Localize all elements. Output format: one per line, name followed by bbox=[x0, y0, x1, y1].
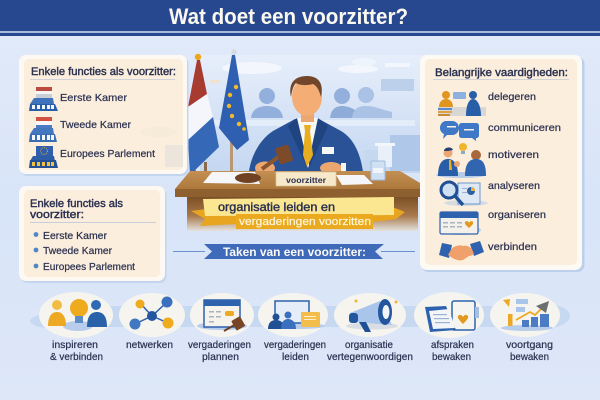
title: Wat doet een voorzitter? bbox=[169, 4, 408, 29]
label: vergaderingen bbox=[188, 339, 251, 351]
skill: motiveren: motiveren bbox=[488, 149, 539, 161]
panel: functions with icons bbox=[19, 55, 188, 176]
label bbox=[327, 339, 413, 363]
papers right bbox=[336, 175, 373, 185]
skill: verbinden: verbinden bbox=[488, 241, 537, 253]
label: leiden bbox=[282, 351, 309, 363]
list item: Europees Parlement: Europees Parlement bbox=[43, 262, 135, 273]
background scene: meeting room bbox=[200, 55, 422, 173]
task strip band bbox=[30, 303, 570, 329]
panel: skills bbox=[420, 55, 584, 272]
icon: Tweede Kamer building bbox=[29, 117, 57, 142]
task: vergaderingen leiden bbox=[258, 293, 328, 363]
section banner: Taken van een voorzitter bbox=[173, 244, 415, 259]
icon: organiseren bbox=[439, 212, 481, 235]
task: voortgang bewaken bbox=[490, 293, 560, 363]
slogan line 1: organisatie leiden en bbox=[218, 200, 335, 214]
EU flag bbox=[219, 49, 249, 173]
skill: delegeren: delegeren bbox=[488, 91, 536, 103]
label: netwerken bbox=[126, 339, 173, 351]
glass of water bbox=[371, 161, 385, 180]
icon: motiveren bbox=[436, 143, 486, 178]
task: organisatie vertegenwoordigen bbox=[327, 293, 413, 363]
label bbox=[264, 339, 326, 363]
label bbox=[431, 339, 474, 363]
label bbox=[50, 339, 103, 363]
panel heading: Belangrijke vaardigheden: bbox=[435, 67, 568, 79]
label: bewaken bbox=[510, 351, 549, 363]
panel heading line 2: voorzitter: bbox=[30, 209, 84, 221]
label: vergaderingen bbox=[264, 339, 326, 351]
header banner bbox=[0, 0, 600, 36]
section banner: Taken van een voorzitter: Taken van een voorzitter: bbox=[223, 245, 366, 259]
task: inspireren & verbinden bbox=[39, 292, 113, 363]
papers on desk bbox=[203, 172, 260, 184]
label: voortgang bbox=[506, 339, 553, 351]
item: Europees Parlement: Europees Parlement bbox=[60, 148, 155, 160]
label: inspireren bbox=[52, 339, 98, 351]
task: afspraken bewaken bbox=[414, 292, 484, 363]
icon: analyseren bbox=[441, 182, 488, 206]
panel heading: Enkele functies als voorzitter: bbox=[31, 66, 176, 78]
item: Eerste Kamer: Eerste Kamer bbox=[60, 92, 128, 104]
icon: Eerste Kamer building bbox=[29, 87, 58, 111]
name plate bbox=[276, 172, 336, 186]
list item: Tweede Kamer: Tweede Kamer bbox=[43, 246, 113, 257]
gavel bbox=[235, 144, 293, 183]
skill: organiseren: organiseren bbox=[488, 209, 546, 221]
task: netwerken bbox=[119, 293, 185, 351]
label: vertegenwoordigen bbox=[327, 351, 413, 363]
name plate: voorzitter bbox=[286, 175, 327, 185]
icon: delegeren bbox=[438, 91, 486, 116]
desk bbox=[175, 144, 430, 231]
Dutch flag bbox=[188, 54, 219, 182]
label: bewaken bbox=[432, 351, 471, 363]
skill: communiceren: communiceren bbox=[488, 122, 561, 134]
item: Tweede Kamer: Tweede Kamer bbox=[60, 119, 131, 131]
slogan line 2: vergaderingen voorzitten bbox=[239, 216, 371, 228]
label: organisatie bbox=[345, 339, 393, 351]
icon: verbinden bbox=[439, 241, 484, 260]
desk slogan banner bbox=[191, 197, 405, 229]
list item: Eerste Kamer: Eerste Kamer bbox=[43, 231, 108, 242]
label bbox=[188, 339, 251, 363]
label bbox=[506, 339, 553, 363]
panel: functions list bbox=[19, 186, 166, 283]
label: & verbinden bbox=[50, 351, 103, 363]
task: vergaderingen plannen bbox=[188, 293, 254, 363]
label: plannen bbox=[202, 351, 239, 363]
icon: Europees Parlement building bbox=[29, 146, 58, 168]
chairperson figure bbox=[249, 76, 363, 174]
panel heading: Enkele functies als bbox=[30, 198, 124, 210]
icon: communiceren bbox=[440, 121, 479, 141]
skill: analyseren: analyseren bbox=[488, 180, 540, 192]
label: afspraken bbox=[431, 339, 474, 351]
